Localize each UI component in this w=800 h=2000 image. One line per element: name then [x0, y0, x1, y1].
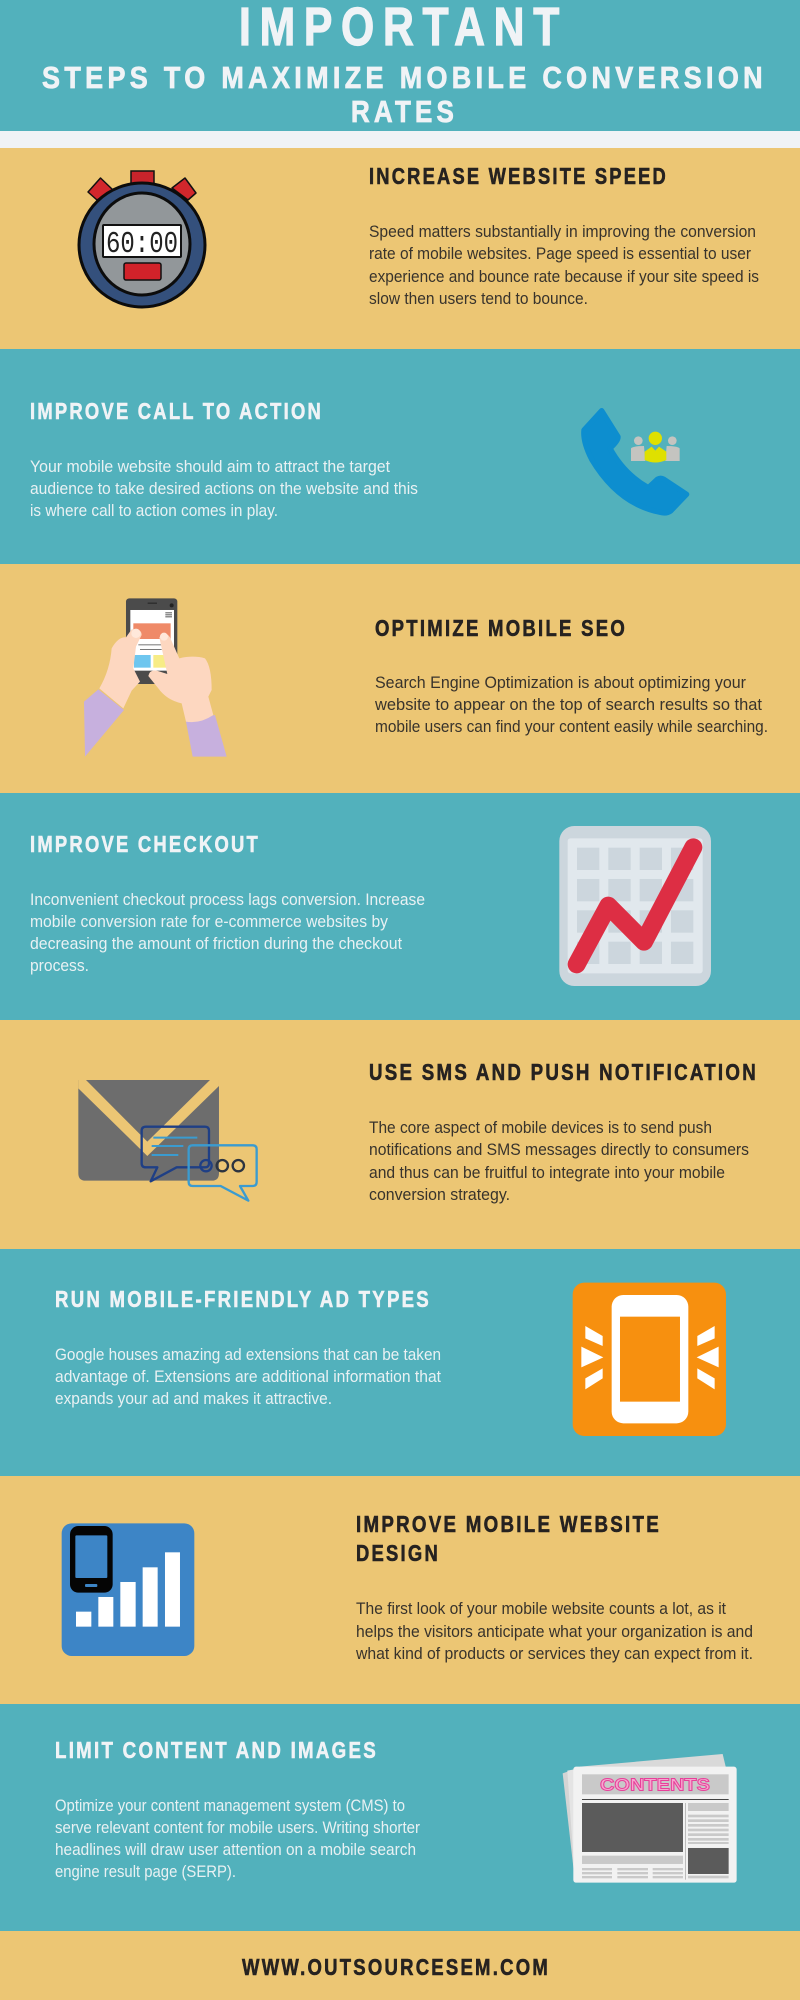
icon: newspaper	[563, 1754, 737, 1883]
text: design body: The first look of your mobile website counts a lot, as it	[356, 1599, 726, 1618]
panel: improve checkout	[0, 793, 800, 1020]
panel: increase website speed	[0, 148, 800, 349]
icon: vibrating phone	[573, 1283, 726, 1436]
heading: improve checkout: IMPROVE CHECKOUT	[30, 831, 260, 857]
panel: optimize mobile seo	[0, 564, 800, 793]
text: ad types body	[55, 1345, 441, 1408]
icon: telephone with people	[584, 411, 687, 513]
panel: footer	[0, 1931, 800, 2000]
text: sms body: conversion strategy.	[369, 1185, 510, 1204]
heading: optimize mobile seo: OPTIMIZE MOBILE SEO	[375, 615, 627, 641]
text: sms body: and thus can be fruitful to integrate into your mobile	[369, 1163, 725, 1182]
text: checkout body: Inconvenient checkout process lags conversion. Increase	[30, 890, 425, 909]
icon: stopwatch	[79, 171, 205, 307]
heading: mobile website design: DESIGN	[356, 1540, 440, 1566]
text: speed body	[369, 222, 759, 308]
text: call to action body: Your mobile website should aim to attract the target	[30, 457, 390, 476]
text: design body: helps the visitors anticipate what your organization is and	[356, 1622, 753, 1641]
text: sms body: The core aspect of mobile devices is to send push	[369, 1118, 712, 1137]
text: seo body	[374, 673, 768, 736]
text: seo body: website to appear on the top of search results so that	[374, 695, 762, 714]
white divider band	[0, 131, 800, 148]
panel: improve mobile website design	[0, 1476, 800, 1704]
text: sms body	[369, 1118, 749, 1204]
text: ad types body: Google houses amazing ad extensions that can be taken	[55, 1345, 441, 1364]
icon: envelope with chat bubbles	[78, 1080, 257, 1201]
text: design body	[355, 1599, 753, 1663]
text: speed body: Speed matters substantially in improving the conversion	[369, 222, 756, 241]
footer website url: WWW.OUTSOURCESEM.COM	[242, 1954, 550, 1980]
text: checkout body: decreasing the amount of friction during the checkout	[30, 934, 402, 953]
text: speed body: rate of mobile websites. Page speed is essential to user	[369, 244, 751, 263]
panel: mobile-friendly ad types	[0, 1249, 800, 1476]
text: speed body: experience and bounce rate because if your site speed is	[369, 267, 759, 286]
panel: improve call to action	[0, 349, 800, 564]
text: checkout body	[30, 890, 425, 975]
icon: stopwatch: 60:00	[106, 227, 178, 262]
text: content body	[55, 1796, 420, 1881]
heading: increase website speed: INCREASE WEBSITE SPEED	[369, 163, 668, 189]
title: RATES	[351, 94, 458, 129]
heading: call to action: IMPROVE CALL TO ACTION	[30, 398, 323, 424]
icon: phone with signal bars	[62, 1523, 194, 1656]
text: ad types body: advantage of. Extensions are additional information that	[55, 1367, 441, 1386]
text: sms body: notifications and SMS messages directly to consumers	[369, 1140, 749, 1159]
text: call to action body	[30, 457, 418, 520]
text: design body: what kind of products or services they can expect from it.	[355, 1644, 753, 1663]
icon: rising line chart	[559, 826, 711, 986]
icon: newspaper: CONTENTS	[600, 1775, 710, 1795]
text: checkout body: process.	[30, 956, 89, 975]
text: ad types body: expands your ad and makes it attractive.	[55, 1389, 332, 1408]
text: seo body: Search Engine Optimization is about optimizing your	[375, 673, 746, 692]
text: seo body: mobile users can find your content easily while searching.	[375, 717, 768, 736]
icon: hands holding smartphone	[84, 598, 227, 757]
heading: mobile website design: IMPROVE MOBILE WEBSITE	[356, 1511, 661, 1537]
heading: mobile website design	[356, 1511, 661, 1566]
text: content body: Optimize your content management system (CMS) to	[55, 1796, 405, 1815]
panel: limit content and images	[0, 1704, 800, 1931]
panel: sms and push notification	[0, 1020, 800, 1249]
text: content body: engine result page (SERP).	[55, 1862, 236, 1881]
text: speed body: slow then users tend to bounce.	[369, 289, 588, 308]
text: content body: serve relevant content for mobile users. Writing shorter	[55, 1818, 420, 1837]
text: checkout body: mobile conversion rate for e-commerce websites by	[30, 912, 388, 931]
text: call to action body: audience to take desired actions on the website and this	[30, 479, 418, 498]
text: content body: headlines will draw user attention on a mobile search	[55, 1840, 416, 1859]
title	[42, 0, 767, 129]
heading: limit content: LIMIT CONTENT AND IMAGES	[55, 1737, 378, 1763]
heading: ad types: RUN MOBILE-FRIENDLY AD TYPES	[55, 1286, 431, 1312]
header band	[0, 0, 800, 131]
text: call to action body: is where call to action comes in play.	[30, 501, 278, 520]
